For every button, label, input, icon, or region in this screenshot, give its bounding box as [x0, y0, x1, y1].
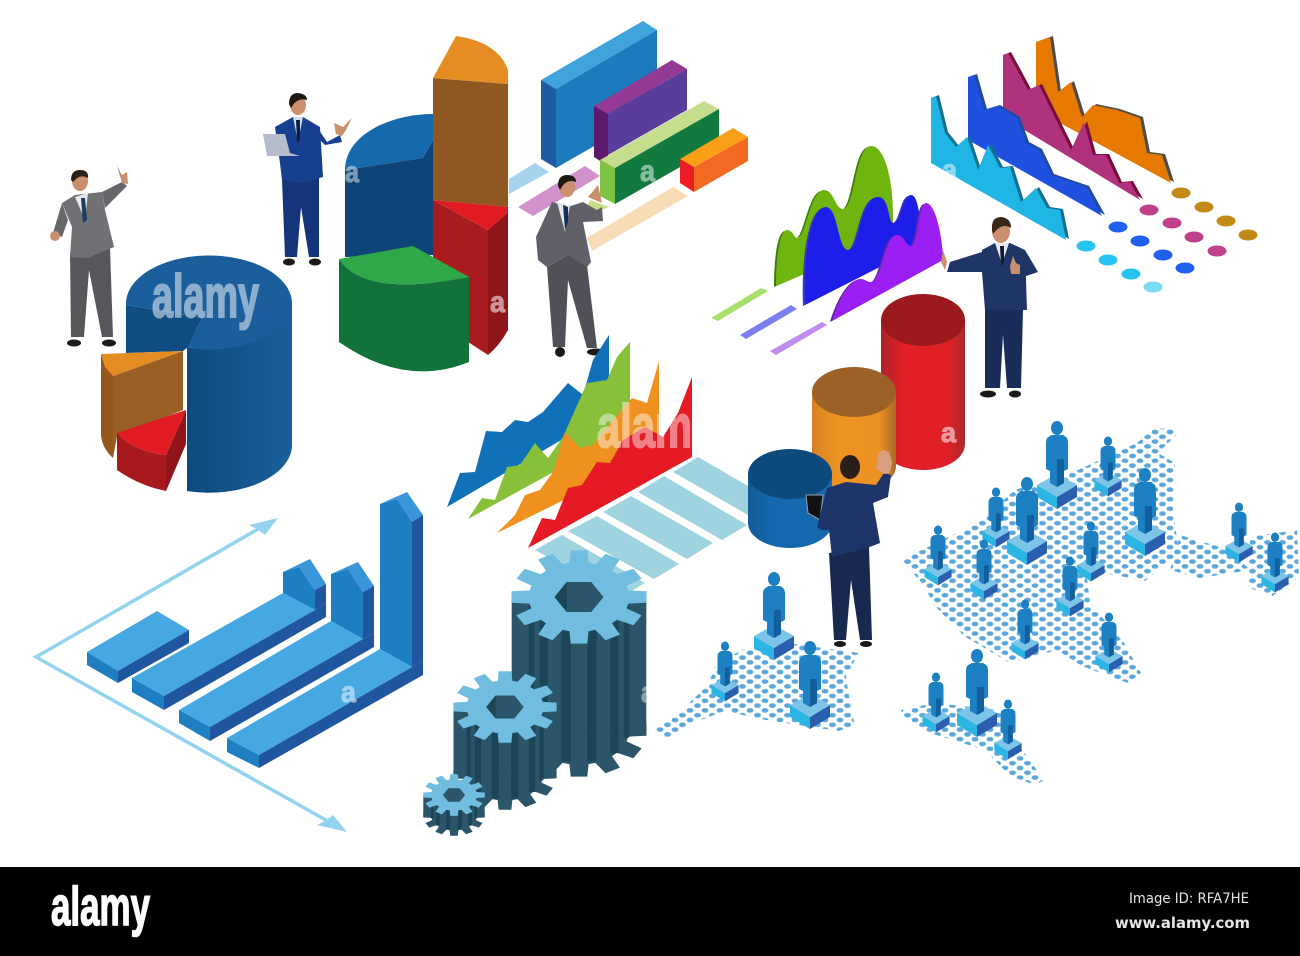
wave legend stripes — [711, 288, 827, 355]
isometric block bars — [541, 21, 748, 204]
map: left continent — [653, 643, 859, 740]
blue slice — [345, 114, 433, 257]
cylinder: red: a — [941, 417, 956, 448]
green block — [600, 101, 719, 204]
center area chart — [447, 335, 692, 548]
watermark alamy: alam — [597, 393, 692, 460]
map: lower continent — [901, 703, 1044, 785]
pie chart top: a — [490, 286, 505, 319]
cylinder: red — [881, 294, 965, 470]
map: east islands — [1170, 535, 1250, 578]
watermark a: a — [641, 676, 655, 709]
orange block — [680, 128, 748, 192]
man: thumbs up — [941, 217, 1038, 398]
man: gray suit left — [50, 166, 128, 346]
medium gear — [453, 671, 557, 810]
watermark a: a — [341, 676, 356, 709]
man: blue suit with laptop — [263, 93, 352, 266]
red series — [528, 377, 692, 548]
pie chart left — [101, 256, 292, 493]
wave chart — [711, 146, 943, 355]
blue wave — [803, 195, 923, 306]
axes arrows — [36, 518, 347, 832]
bar 3 — [179, 562, 374, 741]
blue series — [447, 335, 609, 507]
orange series — [497, 361, 659, 533]
purple wave — [830, 203, 943, 322]
orange slice — [433, 36, 508, 207]
halftone world map — [653, 428, 1299, 785]
pie top — [126, 256, 292, 350]
cylinder: blue — [748, 449, 832, 548]
man: gray suit center — [536, 175, 605, 357]
map: far east — [1248, 530, 1299, 597]
pie body — [187, 302, 292, 493]
legend stripes top — [509, 163, 688, 251]
large gear — [511, 550, 647, 777]
pie chart top — [339, 36, 508, 371]
orange series — [1036, 36, 1174, 183]
green slice — [339, 246, 469, 371]
gears — [423, 550, 655, 836]
blue series — [968, 74, 1105, 216]
green series — [468, 342, 630, 519]
table stripes under chart — [535, 457, 748, 598]
watermarks: a — [345, 156, 359, 189]
bar 1 — [87, 611, 189, 683]
blue block — [541, 21, 657, 168]
jagged area charts — [931, 36, 1258, 292]
cylinder: orange — [812, 367, 896, 491]
map: main continent — [901, 428, 1181, 683]
bar 2 — [132, 559, 326, 710]
footer band — [0, 867, 1300, 956]
small gear — [423, 774, 485, 836]
magenta series — [1003, 52, 1143, 200]
watermark a: a — [640, 155, 655, 188]
image id: Image ID: RFA7HE — [1129, 891, 1249, 907]
cyan series — [931, 95, 1069, 240]
alamy logo: alamy — [51, 875, 150, 937]
watermark a: a — [942, 154, 957, 187]
purple block — [594, 60, 687, 166]
red slice — [117, 410, 186, 491]
orange slice — [101, 351, 183, 458]
website: www.alamy.com — [1115, 914, 1250, 932]
watermark alamy: alamy — [152, 263, 259, 330]
inner face — [126, 305, 202, 353]
legend dots — [1076, 188, 1258, 292]
bar 4 — [227, 492, 423, 768]
man: back view with laptop — [806, 450, 892, 647]
pedestal people — [711, 421, 1289, 759]
red slice — [433, 200, 508, 355]
bar chart with axes arrows — [36, 492, 423, 832]
green wave — [774, 146, 893, 287]
